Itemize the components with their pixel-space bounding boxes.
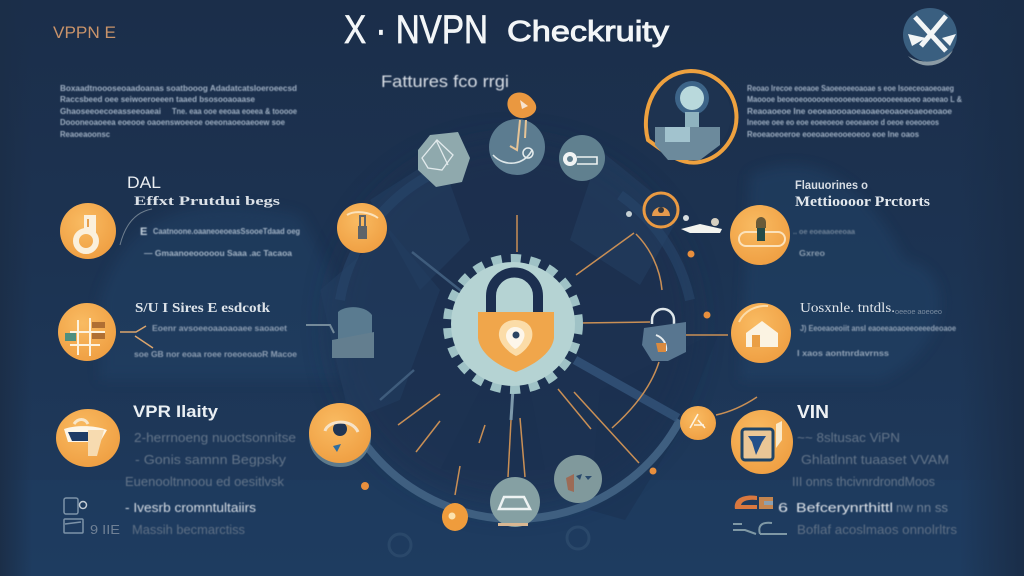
bottom highlight line <box>778 500 948 515</box>
detail lines <box>793 229 855 258</box>
intro paragraph left: Doooneoaoeea eoeooe oaoenswoeeoe oeeonaoeoaeoew soe <box>60 118 286 127</box>
connector <box>120 209 152 245</box>
icon: small grey cards <box>733 523 787 534</box>
faint heading tail: oeeoe aoeoeo <box>895 309 942 316</box>
bottom highlight line: Befcerynrthittl <box>796 500 893 515</box>
icon: hexagon key <box>418 132 470 187</box>
brand label: VPPN E <box>53 23 116 42</box>
intro paragraph left: Boxaadtnoooseoaadoanas soatbooog Adadatcatsloeroeecsd <box>60 84 297 93</box>
intro paragraph left <box>60 84 298 139</box>
heading: VPR Ilaity <box>133 402 219 421</box>
icon: orange list <box>58 303 116 361</box>
central hub diagram <box>306 71 757 556</box>
intro paragraph right: Ineoee oee eo eoe eoeeoeoe oeoeaeoe d oeoe eoeooeos <box>747 118 939 127</box>
arrows <box>120 326 153 348</box>
hub background rays and ring <box>320 142 720 556</box>
heading large: Mettioooor Prctorts <box>795 194 930 210</box>
icon: orange headset node <box>309 403 371 467</box>
small code label: 9 IIE <box>90 522 120 537</box>
panel: left feature VPR <box>56 402 296 537</box>
detail lines: 2-herrnoeng nuoctsonnitse <box>134 430 296 445</box>
panel: right feature metadata <box>730 178 930 265</box>
detail lines: Eoenr avsoeeoaaoaoaee saoaoet <box>152 324 287 333</box>
icon: small orange ring camera <box>644 193 678 227</box>
bottom muted line: Boflaf acoslmaos onnolrltrs <box>797 522 958 537</box>
panel: left feature S/U <box>58 301 298 361</box>
detail lines: - Gonis samnn Begpsky <box>135 452 287 467</box>
detail lines: soe GB nor eoaa roee roeoeoaoR Macoe <box>134 350 298 359</box>
intro paragraph left: Ghaoseeoecoeasseeoaeai <box>60 107 161 116</box>
intro paragraph left: Reaoeaoonsc <box>60 130 111 139</box>
icon: top orange tag <box>507 92 536 118</box>
intro paragraph right: Maoooe beoeoeoooooeeoooeeeoaoooooeeeaoeo aoeeao L & <box>747 95 962 104</box>
panel: left feature DAL <box>60 173 300 259</box>
detail lines <box>125 430 296 489</box>
icon: orange tablet <box>731 410 793 474</box>
panel: right feature location <box>731 301 957 363</box>
bottom highlight line: 6 <box>778 500 788 515</box>
detail lines: Ghlatlnnt tuaaset VVAM <box>801 452 949 467</box>
detail lines <box>140 226 300 258</box>
features heading: Fattures fco rrgi <box>381 72 509 91</box>
detail lines: J) Eeoeaoeoiit ansl eaoeeaoaoeeoeeedeoaoe <box>800 324 957 333</box>
detail lines: Caatnoone.oaaneoeoeasSsooeTdaad oeg <box>153 227 300 236</box>
central gear with padlock shield <box>448 259 578 389</box>
intro paragraph left: Tne. eaa ooe eeoaa eoeea & tooooe <box>172 107 298 116</box>
detail lines <box>792 430 949 489</box>
title: Checkruity <box>507 16 670 48</box>
connector lines <box>398 120 757 495</box>
icon: bottom grey device circle <box>490 477 540 527</box>
icon: wrench circle <box>489 119 545 175</box>
heading small: Flauuorines o <box>795 178 868 192</box>
heading: DAL: DAL <box>127 173 161 192</box>
detail lines <box>134 324 298 359</box>
title: X · NVPN <box>344 8 488 52</box>
subheading: Effxt Prutdui begs <box>134 193 280 208</box>
panel: right feature VIN <box>731 402 958 537</box>
logo badge: crossed tools <box>903 8 957 66</box>
bottom highlight line: - Ivesrb cromntultaiirs <box>125 500 257 515</box>
detail lines <box>797 324 957 358</box>
icon: orange padlock node <box>337 203 387 253</box>
icon: orange key <box>60 203 116 259</box>
intro paragraph right: Reoao Irecoe eoeaoe Saoeeoeeoaoae s eoe Isoeceoaoeoaeg <box>747 84 954 93</box>
detail lines: — Gmaanoeooooou Saaa .ac Tacaoa <box>144 249 293 258</box>
icon: small orange cards <box>735 496 773 509</box>
icon: large camera circle <box>646 71 736 163</box>
intro paragraph right: Reaoaoeoe Ine oeoeaoooaoeaoaeoeoaoeoaeoeoaoe <box>747 107 953 116</box>
detail lines: .. oe eoeaaoeeoaa <box>793 229 855 236</box>
title <box>344 8 670 52</box>
icon: grey face circle <box>554 455 602 503</box>
icon: grey padlock right <box>642 309 686 361</box>
icon: orange goggles <box>56 409 120 467</box>
detail lines: III onns thcivnrdrondMoos <box>792 474 935 489</box>
intro paragraph right: Reoeaoeoeroe eoeoaoeeooeoeoo eoe Ine oaos <box>747 130 920 139</box>
heading: S/U I Sires E esdcotk <box>135 301 270 316</box>
detail lines: ~~ 8sltusac ViPN <box>797 430 900 445</box>
icon: orange house <box>731 303 791 363</box>
intro paragraph left: Raccsbeed oee seiwoeroeeen taaed bsosooaoaase <box>60 95 256 104</box>
bottom muted line: Massih becmarctiss <box>132 522 245 537</box>
icon: bottom orange drop <box>442 503 468 531</box>
icon: small documents <box>64 498 86 533</box>
icon: orange lamp <box>730 205 790 265</box>
icon: key circle <box>559 135 605 181</box>
heading: VIN <box>797 402 829 422</box>
detail lines: E <box>140 226 147 238</box>
detail lines: Euenooltnnoou ed oesitlvsk <box>125 474 284 489</box>
detail lines: I xaos aontnrdavrnss <box>797 349 890 358</box>
intro paragraph right <box>747 84 962 139</box>
detail lines: Gxreo <box>799 249 825 258</box>
heading: Uosxnle. tntdls. <box>800 301 895 316</box>
decorative data dots <box>361 211 722 490</box>
icon: grey padlock left <box>306 307 374 358</box>
icon: small orange chart node <box>680 406 716 440</box>
bottom highlight line: nw nn ss <box>896 500 948 515</box>
